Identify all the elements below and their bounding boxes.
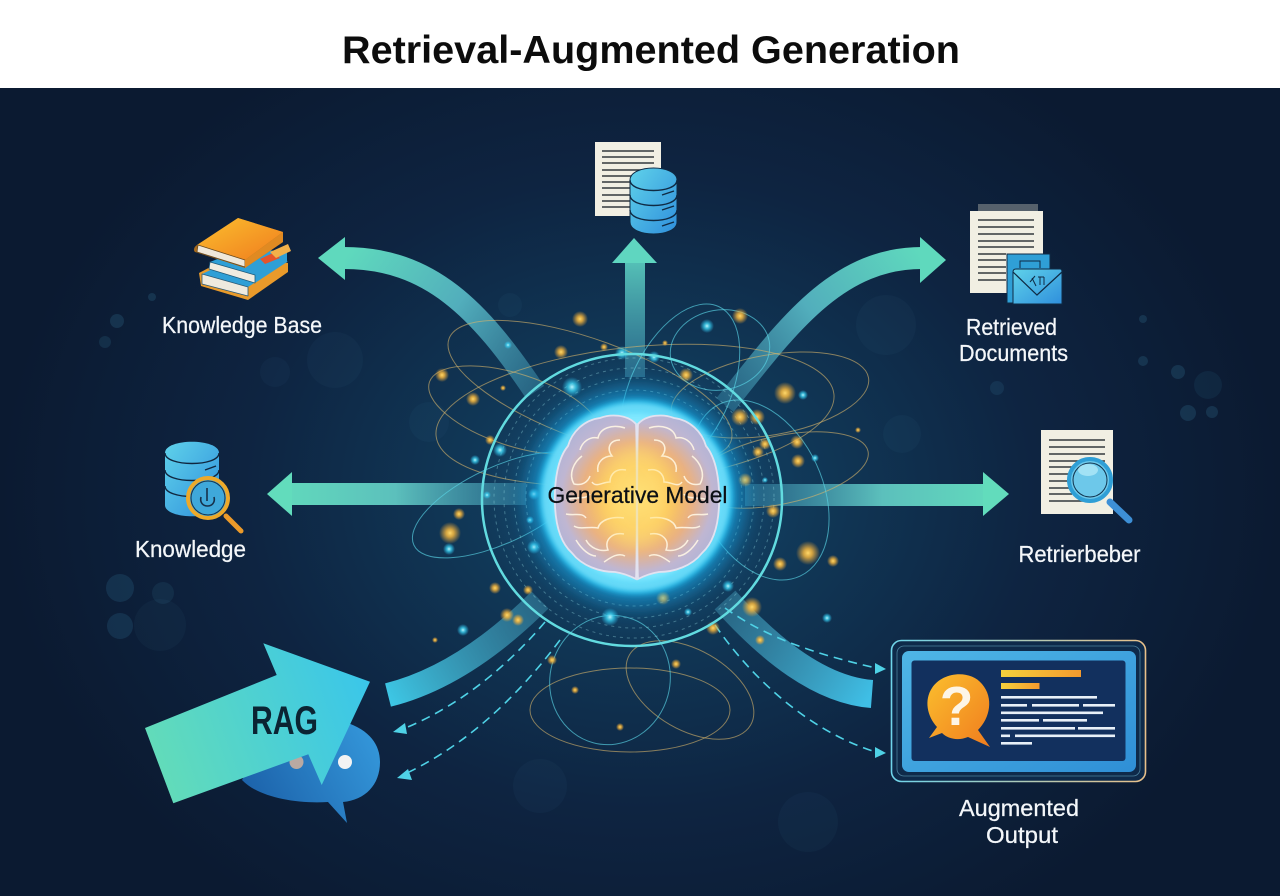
arrow: to knowledge base [318, 237, 535, 392]
text lines [1001, 696, 1115, 745]
RAG arrow [145, 643, 370, 803]
label: Retrierbeber: Retrierbeber [1018, 541, 1141, 567]
generative model: outer ring [482, 354, 782, 646]
generative model: glowing core [526, 387, 746, 607]
label: Knowledge: Knowledge [135, 536, 246, 562]
panel: augmented output [892, 640, 1146, 782]
RAG arrow: RAG [251, 699, 318, 743]
label: Augmented Output: Output [986, 822, 1059, 848]
generative model: gold and cyan particles [432, 308, 861, 731]
icon: question bubble: ? [940, 675, 973, 737]
background bokeh [99, 293, 1222, 852]
generative model: orbit network [398, 285, 875, 760]
arrow: from model to output [725, 600, 872, 694]
label: Retrieved Documents: Retrieved [966, 314, 1057, 340]
arrow: from RAG to model [388, 600, 540, 695]
icon: document with magnifier [1041, 430, 1129, 520]
arrow: to knowledge [267, 472, 526, 516]
title: Retrieval-Augmented Generation [342, 29, 960, 72]
generative model label: Generative Model [548, 482, 728, 508]
headline bars [1001, 670, 1081, 689]
label: Augmented Output: Augmented [959, 795, 1079, 821]
arrow: to document store [612, 238, 657, 377]
icon: document with database [595, 142, 677, 234]
dashed arrows: to output [715, 608, 886, 758]
label: Retrieved Documents: Documents [959, 340, 1068, 366]
dashed arrows: back to RAG [393, 622, 560, 780]
header band [0, 0, 1280, 88]
label: Knowledge Base: Knowledge Base [162, 312, 322, 338]
icon: question bubble [927, 674, 990, 747]
label: Retrieved Documents [959, 314, 1068, 366]
arrow: to retrieved documents [725, 237, 946, 405]
label: Augmented Output [959, 795, 1079, 848]
arrow: to retriever [745, 472, 1009, 516]
icon: chat bubble [242, 722, 380, 823]
icon: database with magnifier [165, 442, 241, 531]
generative model: brain [555, 416, 719, 579]
icon: retrieved documents [970, 204, 1062, 304]
icon: stack of books [194, 218, 291, 300]
